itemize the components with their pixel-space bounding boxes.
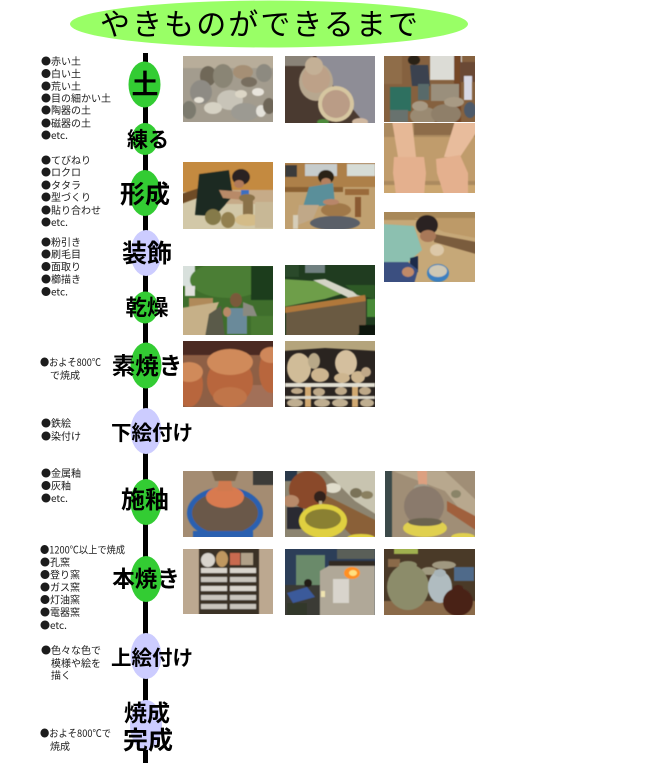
notes: clays: ●赤い土 [41,53,81,68]
notes: bisque firing [40,354,101,382]
notes: glazes: ●灰釉 [41,478,71,492]
photo: pouring glaze from jar [285,471,375,537]
notes: clays: ●目の細かい土 [41,90,111,105]
photo: loaded kiln [183,549,273,614]
photo: drying vessels outdoors [183,266,273,335]
notes: forming methods: ●etc. [41,214,68,229]
notes: decoration: ●面取り [41,258,81,274]
notes: clays: ●陶器の土 [41,102,91,117]
photo: raw clay rubble [183,56,273,122]
photo: dipping bowl in glaze [183,471,273,537]
notes: decoration: ●櫛描き [41,271,81,286]
notes: main firing and kilns: ●登り窯 [40,566,80,582]
step: 下絵付け [111,408,193,454]
notes: bisque firing: ●およそ800℃ [40,354,101,369]
step: 本焼き: 本焼き [112,567,180,592]
title banner: やきものができるまで [100,9,418,42]
step: 焼成 / 完成: 焼成 [124,700,170,726]
notes: main firing and kilns: ●ガス窯 [40,579,80,594]
step: 本焼き [112,556,180,602]
notes: main firing and kilns: ●灯油窯 [40,592,80,606]
notes: main firing and kilns: ●孔窯 [40,554,70,569]
photo: hand forming on wheel [183,162,273,229]
notes: main firing and kilns: ●電器窯 [40,604,80,619]
photo: coating jar with glaze [385,471,475,537]
notes: decoration [41,234,81,298]
notes: overglaze [41,642,101,682]
step: 装飾 [122,230,172,276]
photo: finished glazed jars [384,549,475,615]
notes: forming methods: ●ロクロ [41,164,81,179]
step: 下絵付け: 下絵付け [111,422,193,445]
notes: forming methods: ●型づくり [41,189,91,204]
notes: decoration: ●etc. [41,284,68,298]
notes: clays: ●磁器の土 [41,115,91,130]
step: 乾燥: 乾燥 [125,296,169,320]
step: 練る: 練る [127,129,169,152]
notes: overglaze: 描く [51,667,71,682]
process timeline spine [143,53,148,763]
notes: main firing and kilns [40,542,125,632]
step: 焼成 / 完成 [123,700,173,755]
photo: pug mill [384,56,475,122]
notes: clays: ●荒い土 [41,78,81,93]
notes: glazes [41,465,81,505]
photo: man brushing slip on plates [384,212,475,282]
notes: forming methods: ●てびねり [41,152,91,167]
notes: clays [41,53,111,142]
step: 施釉 [121,479,169,525]
step: 焼成 / 完成: 完成 [123,727,173,755]
notes: underglaze: ●鉄絵 [41,415,71,430]
notes: bisque firing: で焼成 [50,367,80,382]
photo: potter at wheel with bowl [285,163,375,229]
notes: final firing: 焼成 [50,738,70,753]
notes: forming methods: ●タタラ [41,177,81,192]
photo: long drying wall of bricks [285,265,375,335]
photo: clay in buckets [285,56,375,123]
photo: bisque ware stacked in kiln [285,341,375,407]
step: 素焼き [112,342,182,388]
step: 土: 土 [132,70,158,100]
notes: final firing [40,725,111,753]
step: 上絵付け [111,633,193,679]
notes: overglaze: 模様や絵を [51,655,101,670]
step: 土 [128,62,160,108]
step: 上絵付け: 上絵付け [111,647,193,670]
notes: underglaze: ●染付け [41,428,81,443]
notes: decoration: ●粉引き [41,234,81,249]
step: 形成: 形成 [120,181,170,209]
step: 施釉: 施釉 [121,487,169,514]
step: 装飾: 装飾 [122,240,172,268]
step: 素焼き: 素焼き [112,353,182,379]
notes: main firing and kilns: ●etc. [40,617,67,632]
notes: forming methods: ●貼り合わせ [41,202,101,217]
photo: hands kneading clay [384,123,475,193]
notes: glazes: ●金属釉 [41,465,81,480]
photo: bisque-fired bowls [183,341,273,407]
photo: firing the kiln [285,549,375,615]
title banner [70,0,468,48]
notes: underglaze [41,415,81,443]
notes: clays: ●白い土 [41,66,81,80]
notes: overglaze: ●色々な色で [41,642,101,657]
notes: glazes: ●etc. [41,490,68,505]
notes: forming methods [41,152,101,229]
notes: main firing and kilns: ●1200℃以上で焼成 [40,542,125,556]
notes: final firing: ●およそ800℃で [40,725,111,740]
notes: clays: ●etc. [41,127,68,142]
notes: decoration: ●刷毛目 [41,246,81,261]
step: 形成 [120,170,170,216]
